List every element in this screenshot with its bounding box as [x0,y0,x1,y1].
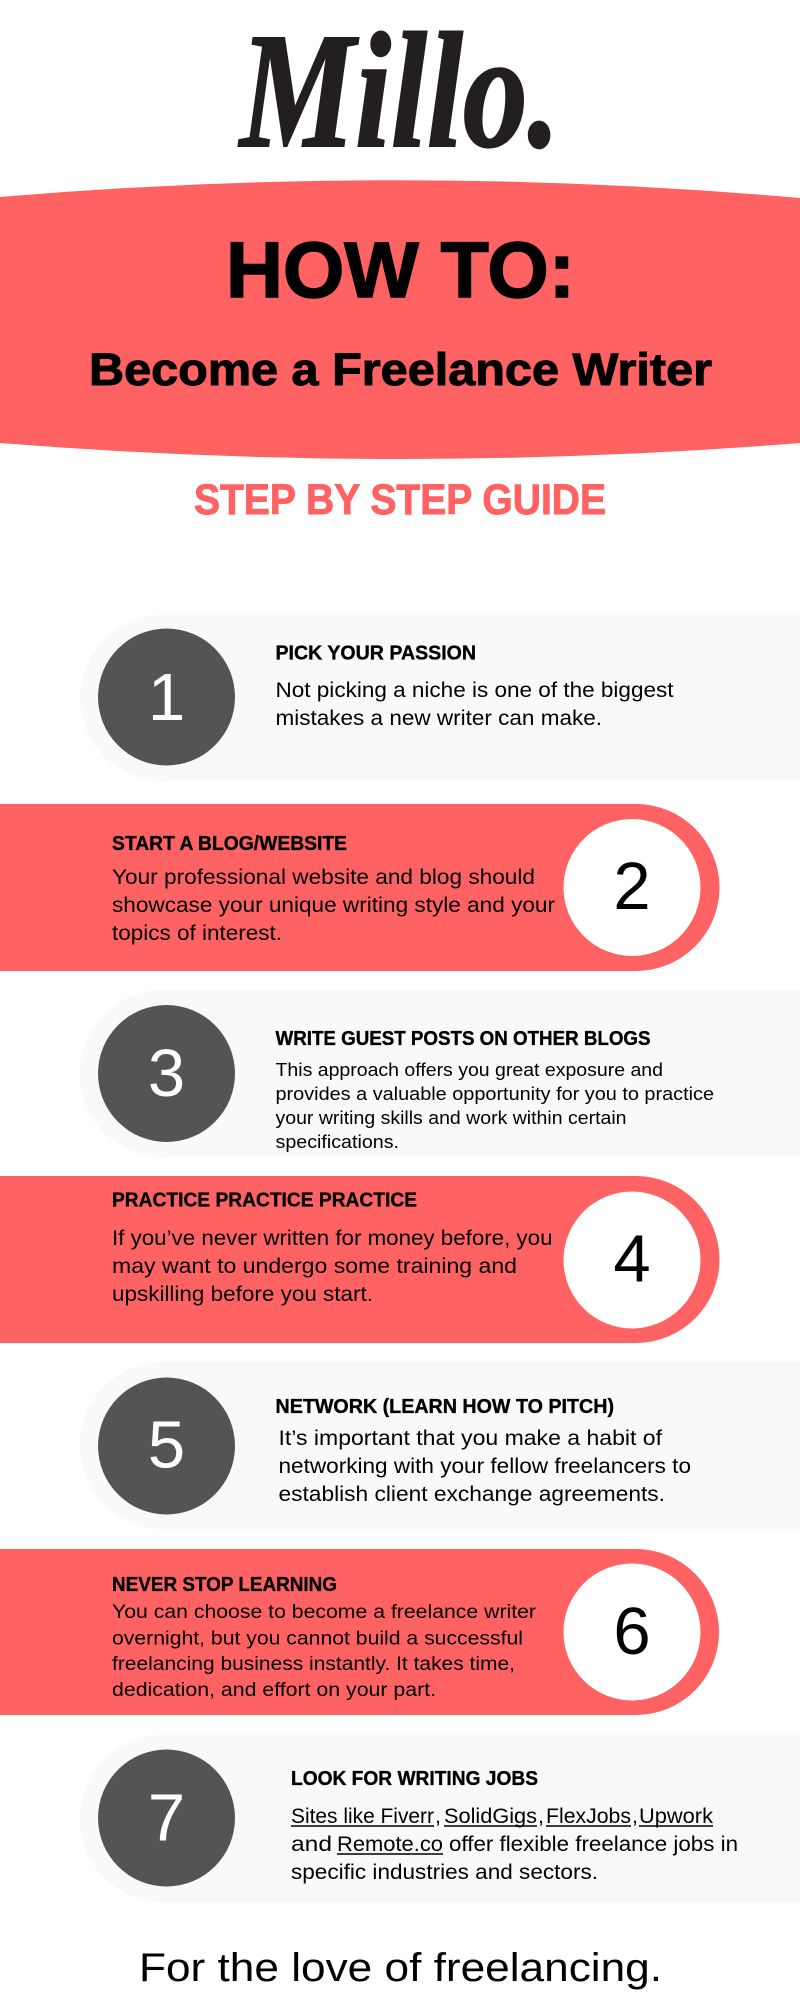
step 1 body: Not picking a niche is one of the biggest [276,678,674,702]
step 3 [80,990,800,1157]
step 2 circle [564,819,700,956]
step 1 panel [80,615,800,781]
step 3 panel [80,990,800,1157]
step 5 body [278,1426,691,1506]
step 5 body: networking with your fellow freelancers to [278,1454,691,1478]
footer tagline: For the love of freelancing. [139,1946,662,1990]
step 4 body: may want to undergo some training and [112,1254,517,1278]
step 4 [0,1176,720,1343]
step 1 heading: PICK YOUR PASSION [276,642,476,664]
heading: step by step guide: STEP BY STEP GUIDE [194,476,606,524]
step 3 body: your writing skills and work within certain [276,1107,626,1128]
step 7 body: , [435,1804,441,1828]
step 7 body: specific industries and sectors. [291,1860,598,1884]
step 6 body: overnight, but you cannot build a successful [112,1628,523,1650]
step 1 body: mistakes a new writer can make. [276,706,602,730]
step 6 panel [0,1549,719,1715]
step 6 body: dedication, and effort on your part. [112,1679,436,1701]
step 4 body: upskilling before you start. [112,1282,373,1306]
step 3 body: This approach offers you great exposure and [276,1059,663,1080]
title: HOW TO: [226,225,575,314]
step 6 [0,1549,719,1715]
step 3 body [276,1059,714,1152]
step 7 body: and [291,1832,332,1856]
step 4 body [112,1226,552,1306]
step 5 circle [98,1378,235,1514]
step 5 body: It’s important that you make a habit of [278,1426,662,1450]
step 3 body: provides a valuable opportunity for you to practice [276,1083,714,1104]
step 7 body: Remote.co [337,1832,443,1856]
step 7 body: Upwork [639,1804,713,1828]
step 6 number: 6 [613,1594,651,1669]
step 4 panel [0,1176,720,1343]
step 7 body: offer flexible freelance jobs in [449,1832,738,1856]
step 6 body: You can choose to become a freelance writer [112,1601,537,1623]
step 4 heading: PRACTICE PRACTICE PRACTICE [112,1190,417,1212]
step 7 body: SolidGigs [444,1804,537,1828]
step 4 body: If you’ve never written for money before, you [112,1226,552,1250]
step 7 body: , [632,1804,638,1828]
step 7 body: FlexJobs [546,1804,631,1828]
step 6 body [112,1601,537,1701]
step 3 body: specifications. [276,1131,399,1152]
logo: Millo: Millo. [238,0,560,182]
step 1 [80,615,800,781]
subtitle: Become a Freelance Writer [89,344,712,395]
step 1 body [276,678,674,730]
step 2 body [112,865,555,945]
step 7 number: 7 [148,1780,185,1856]
step 2 number: 2 [613,849,651,924]
step 6 heading: NEVER STOP LEARNING [112,1574,337,1596]
step 2 body: showcase your unique writing style and your [112,893,555,917]
step 6 circle [564,1564,700,1700]
step 6 body: freelancing business instantly. It takes time, [112,1653,515,1675]
step 1 number: 1 [148,660,185,735]
step 7 panel [80,1735,800,1902]
step 2 heading: START A BLOG/WEBSITE [112,833,347,855]
step 7 body [291,1804,738,1884]
step 3 heading: WRITE GUEST POSTS ON OTHER BLOGS [276,1028,650,1050]
banner shape [0,180,800,459]
step 5 [80,1362,800,1529]
step 2 body: topics of interest. [112,921,282,945]
step 2 [0,804,720,971]
step 3 circle [98,1005,235,1142]
step 5 number: 5 [148,1408,185,1482]
step 5 body: establish client exchange agreements. [278,1482,665,1506]
step 4 circle [564,1192,700,1328]
step 2 panel [0,804,720,971]
step 7 heading: LOOK FOR WRITING JOBS [291,1768,538,1790]
step 5 heading: NETWORK (LEARN HOW TO PITCH) [276,1396,614,1418]
step 7 body: Sites like Fiverr [291,1804,434,1828]
step 2 body: Your professional website and blog should [112,865,535,889]
step 5 panel [80,1362,800,1529]
step 4 number: 4 [613,1222,651,1296]
step 3 number: 3 [148,1036,185,1111]
step 7 circle [98,1750,235,1886]
step 1 circle [98,628,235,766]
step 7 [80,1735,800,1902]
banner [0,180,800,459]
step 7 body: , [538,1804,544,1828]
